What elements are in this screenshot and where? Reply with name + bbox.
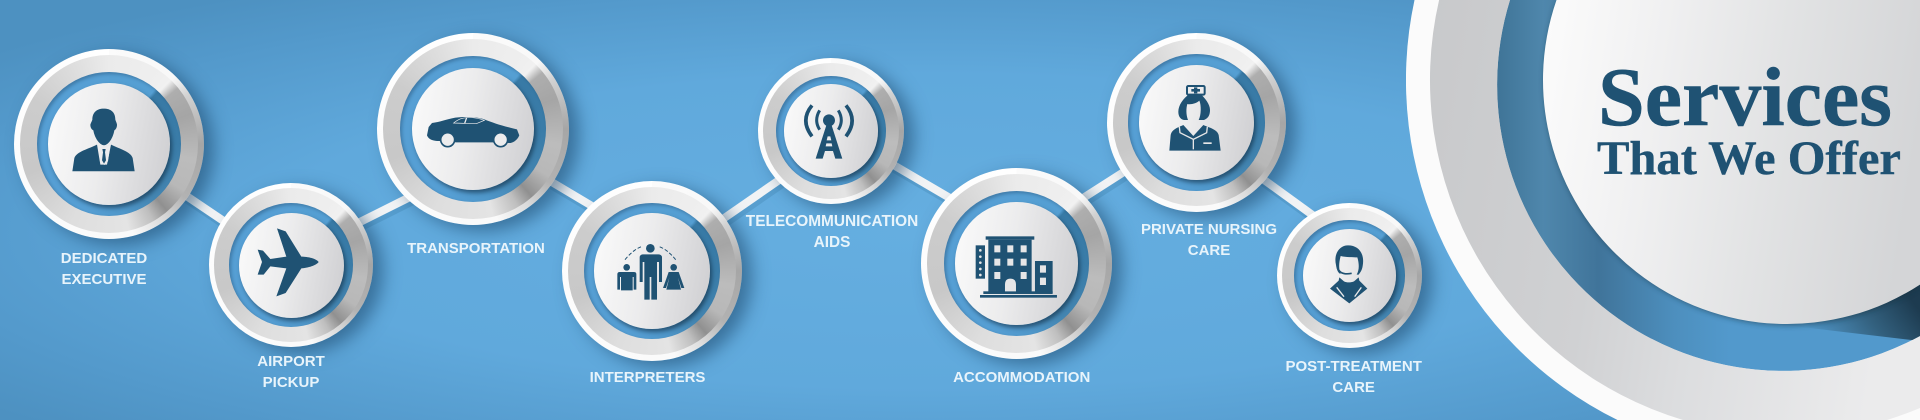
label: CARE: [1332, 378, 1375, 396]
label: TELECOMMUNICATION: [746, 212, 918, 230]
label: TRANSPORTATION: [407, 240, 545, 256]
icon: car: [427, 117, 520, 148]
label: [1285, 358, 1422, 396]
ring: [1107, 33, 1286, 212]
outer white rim: [1406, 0, 1920, 420]
title disc: [1543, 0, 1920, 324]
node: post-treatment care: [1277, 200, 1442, 396]
node: private nursing care: [1107, 30, 1306, 258]
label: INTERPRETERS: [590, 368, 705, 386]
icon: executive: [72, 108, 135, 172]
label: POST-TREATMENT: [1285, 358, 1422, 374]
ring: [209, 183, 373, 347]
label: [1141, 220, 1277, 258]
node: airport pickup: [209, 180, 392, 390]
ring: [377, 33, 569, 225]
icon: call agent: [1330, 245, 1368, 304]
label: EXECUTIVE: [61, 270, 147, 288]
label: [746, 212, 918, 250]
label: AIRPORT: [257, 352, 325, 370]
icon: airplane: [258, 228, 319, 296]
label: PRIVATE NURSING: [1141, 220, 1277, 238]
ring: [562, 181, 742, 361]
hole: [1497, 0, 1920, 371]
icon: interpreters: [617, 244, 684, 300]
icon: hotel building: [976, 236, 1057, 298]
title: [1597, 55, 1901, 185]
label: CARE: [1188, 242, 1230, 258]
label: ACCOMMODATION: [953, 368, 1090, 386]
node: transportation: [377, 30, 588, 256]
label: PICKUP: [263, 374, 319, 390]
node: telecommunication aids: [746, 54, 924, 250]
label: AIDS: [814, 234, 850, 250]
ring: [14, 49, 204, 239]
node: dedicated executive: [14, 46, 224, 288]
ring: [921, 168, 1112, 359]
grey band: [1430, 0, 1920, 420]
icon: antenna tower: [804, 104, 854, 159]
ring: [758, 58, 904, 204]
node: interpreters: [562, 178, 762, 386]
node: accommodation: [921, 164, 1132, 386]
icon: nurse: [1169, 85, 1221, 151]
label: DEDICATED: [61, 250, 147, 266]
panel: big title circle: [1406, 0, 1920, 420]
label: [61, 250, 147, 288]
ring: [1277, 203, 1422, 348]
title: That We Offer: [1597, 132, 1901, 185]
label: [257, 352, 325, 390]
